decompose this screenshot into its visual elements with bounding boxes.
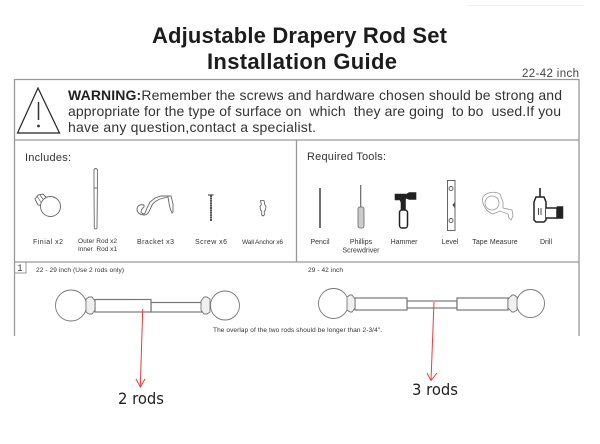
size range label: 22-42 inch [522, 68, 579, 80]
panel: includes [25, 152, 283, 253]
item labels: Wall Anchor x6 [242, 239, 283, 246]
icon: screwdriver [358, 185, 364, 228]
item labels: Outer Rod x2 [78, 238, 117, 245]
arrow: to 2 rods [136, 309, 145, 387]
icon: pencil [319, 188, 321, 228]
item labels: Screw x6 [195, 239, 227, 246]
step number box [14, 262, 26, 273]
title: Installation Guide [207, 49, 397, 74]
item labels: Finial x2 [33, 239, 63, 246]
label: 3 rods: 3 rods [412, 380, 458, 399]
caption: 22-29 inch: 22 - 29 inch (Use 2 rods only) [36, 267, 124, 274]
icon: warning triangle [18, 88, 60, 133]
warning text: appropriate for the type of surface on which they are going to bo used.If you [68, 103, 561, 119]
tool labels: Level [442, 239, 459, 246]
icon: rods [94, 168, 97, 229]
diagram: three-rod configuration [318, 288, 544, 318]
title [152, 23, 448, 74]
icon: bracket [137, 196, 173, 215]
tool labels: Tape Measure [472, 239, 518, 246]
item labels [33, 238, 283, 253]
icon: wall anchor [260, 200, 266, 216]
panel: required tools [307, 151, 562, 254]
diagram: two-rod configuration [56, 290, 240, 321]
item labels: Bracket x3 [137, 239, 174, 246]
tool labels: Phillips [350, 239, 373, 246]
step number box: 1 [18, 263, 23, 273]
tool labels: Pencil [310, 239, 330, 246]
title: Adjustable Drapery Rod Set [152, 23, 448, 48]
icon: finial [35, 194, 60, 216]
label: 2 rods: 2 rods [118, 389, 164, 408]
warning text: have any question,contact a specialist. [68, 119, 316, 135]
tool labels: Hammer [391, 239, 418, 246]
icon: hammer [395, 192, 416, 228]
icon: drill [534, 188, 562, 222]
overlap note: The overlap of the two rods should be longer than 2-3/4". [213, 327, 382, 334]
warning text [68, 87, 562, 135]
caption: 29-42 inch: 29 - 42 inch [308, 267, 343, 274]
tool labels [310, 239, 552, 254]
icon: level [448, 180, 455, 230]
heading: includes: Includes: [25, 152, 71, 164]
icon: screw [208, 195, 214, 221]
warning text: WARNING:Remember the screws and hardware chosen should be strong and [68, 87, 562, 103]
arrow: to 3 rods [427, 302, 437, 380]
icon: tape measure [483, 192, 513, 220]
instruction sheet frame [14, 80, 579, 336]
tool labels: Screwdriver [343, 248, 380, 254]
item labels: Inner Rod x1 [78, 246, 117, 253]
heading: required tools: Required Tools: [307, 151, 386, 163]
tool labels: Drill [540, 239, 552, 246]
